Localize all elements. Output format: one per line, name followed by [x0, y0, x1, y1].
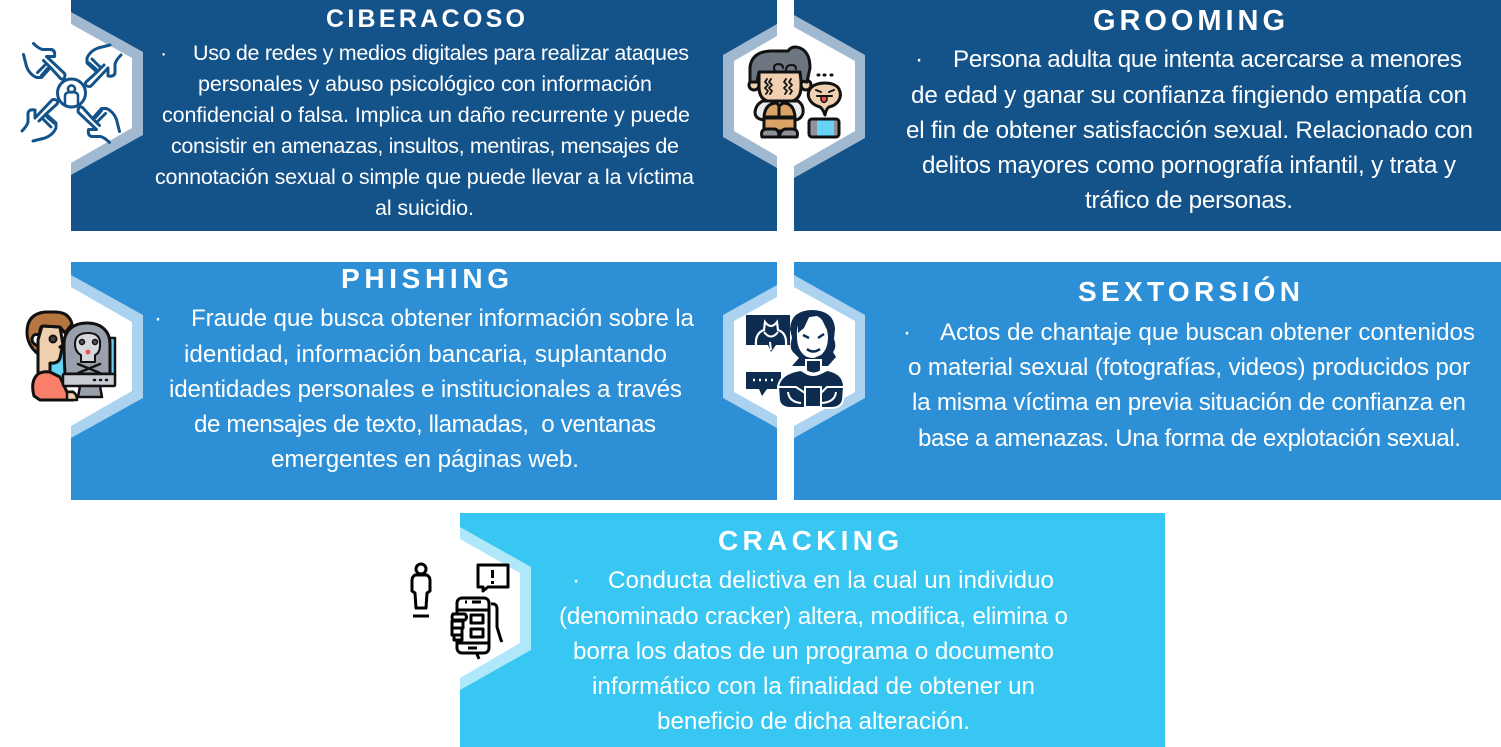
icon: person facing a skull on a computer [27, 312, 115, 400]
text block: grooming: de edad y ganar su confianza fingiendo empatía con [911, 82, 1467, 109]
text block: sextorsion [903, 319, 1475, 452]
panel: phishing [71, 262, 777, 500]
heading: grooming: GROOMING [1093, 5, 1285, 37]
text block: ciberacoso: consistir en amenazas, insultos, mentiras, mensajes de [171, 134, 679, 158]
text block: cracking: (denominado cracker) altera, modifica, elimina o [559, 603, 1068, 630]
text block: sextorsion: o material sexual (fotografías, videos) producidos por [908, 354, 1470, 381]
text block: cracking: Conducta delictiva en la cual un individuo [608, 567, 1054, 594]
text block: cracking: borra los datos de un programa o documento [573, 638, 1054, 665]
heading: cracking: CRACKING [718, 525, 899, 556]
text block: grooming: delitos mayores como pornografía infantil, y trata y [922, 152, 1457, 179]
text block: ciberacoso: · [160, 41, 167, 65]
panel: cracking [460, 513, 1165, 747]
text block: cracking: beneficio de dicha alteración. [657, 708, 970, 735]
text block: cracking: · [572, 567, 580, 594]
icon: person and smartphone with alert [412, 564, 508, 659]
icon: sad child with taunting bubble and phone [749, 47, 840, 137]
heading: sextorsion: SEXTORSIÓN [1078, 276, 1300, 307]
text block: phishing: identidad, información bancaria, suplantando [184, 341, 667, 368]
text block: grooming: el fin de obtener satisfacción sexual. Relacionado con [906, 117, 1473, 144]
text block: ciberacoso: confidencial o falsa. Implica un daño recurrente y puede [162, 103, 690, 127]
text block: ciberacoso: Uso de redes y medios digitales para realizar ataques [193, 41, 689, 65]
text block: sextorsion: Actos de chantaje que buscan obtener contenidos [940, 319, 1475, 346]
text block: phishing [154, 305, 695, 473]
text block: phishing: de mensajes de texto, llamadas, o ventanas [194, 411, 656, 438]
heading: phishing: PHISHING [341, 263, 509, 294]
text block: grooming: · [915, 46, 923, 73]
text block: grooming [906, 46, 1473, 214]
text block: phishing: emergentes en páginas web. [271, 446, 579, 473]
text block: ciberacoso: connotación sexual o simple que puede llevar a la víctima [155, 165, 694, 189]
text block: sextorsion: base a amenazas. Una forma de explotación sexual. [918, 425, 1461, 452]
text block: grooming: tráfico de personas. [1085, 187, 1293, 214]
icon: pointing hands around a person [22, 44, 121, 142]
text block: phishing: Fraude que busca obtener información sobre la [191, 305, 695, 332]
heading: ciberacoso: CIBERACOSO [326, 5, 525, 33]
text block: grooming: Persona adulta que intenta acercarse a menores [953, 46, 1462, 73]
text block: phishing: · [154, 305, 162, 332]
panel: sextorsion [794, 262, 1501, 500]
text block: cracking: informático con la finalidad de obtener un [592, 673, 1035, 700]
icon: woman with photo and message [746, 310, 844, 408]
text block: ciberacoso [155, 41, 694, 220]
text block: ciberacoso: personales y abuso psicológico con información [198, 72, 652, 96]
panel: grooming [794, 0, 1501, 231]
text block: cracking [559, 567, 1068, 735]
text block: ciberacoso: al suicidio. [375, 196, 474, 220]
panel: ciberacoso [71, 0, 777, 231]
text block: sextorsion: · [903, 319, 911, 346]
text block: phishing: identidades personales e institucionales a través [169, 376, 682, 403]
text block: sextorsion: la misma víctima en previa situación de confianza en [912, 389, 1466, 416]
